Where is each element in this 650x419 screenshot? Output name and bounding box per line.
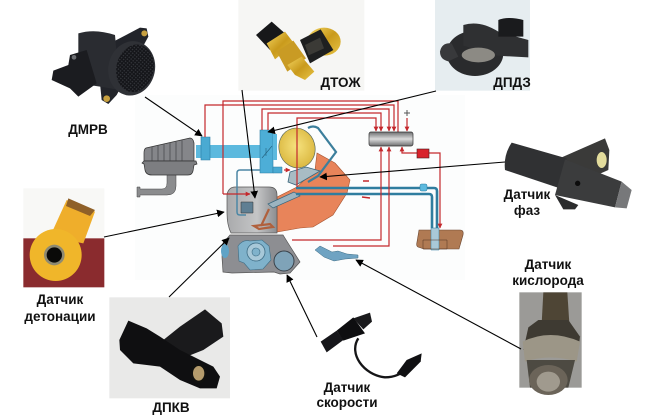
photo: mass air flow sensor (52, 28, 160, 104)
pointer arrows (104, 90, 521, 349)
ECU (369, 132, 413, 146)
label: Датчик детонации: Датчик (37, 292, 84, 307)
engine block (221, 170, 300, 274)
fuel filter (420, 184, 427, 191)
photo: camshaft phase sensor (505, 138, 632, 209)
plus terminal (404, 110, 410, 116)
photo: coolant temperature sensor (238, 0, 364, 91)
label: ДМРВ: ДМРВ (68, 122, 108, 137)
photo: knock sensor (23, 188, 104, 287)
label: ДПДЗ: ДПДЗ (493, 75, 531, 90)
crankcase (222, 235, 300, 274)
yellow plenum (274, 124, 320, 172)
label: Датчик кислорода: кислорода (512, 273, 584, 288)
label: ДТОЖ: ДТОЖ (320, 75, 361, 90)
arrow: датчик фаз (320, 162, 505, 177)
fuel tank (417, 228, 463, 250)
label: Датчик фаз: фаз (514, 203, 540, 218)
label A (284, 169, 290, 171)
photo: throttle position sensor (435, 0, 530, 91)
photo: oxygen sensor (519, 292, 582, 395)
arrow: датчик детонации (104, 212, 224, 237)
photo: speed sensor (321, 313, 422, 377)
throttle body: А (290, 169, 296, 178)
arrow: ДПДЗ (268, 91, 436, 132)
injector rail (268, 126, 336, 208)
fuel pump relay (417, 149, 429, 158)
label: Датчик скорости: Датчик (324, 380, 371, 395)
throttle body (260, 130, 296, 178)
label: Датчик детонации: детонации (24, 309, 96, 324)
photo: crankshaft position sensor (109, 297, 230, 398)
label: Датчик фаз: Датчик (504, 187, 551, 202)
arrow: ДПКВ (169, 238, 229, 297)
arrow: ДМРВ (145, 97, 202, 136)
oxygen sensor on exhaust (315, 246, 358, 261)
orange intake manifold (277, 153, 350, 232)
label: ДПКВ: ДПКВ (152, 400, 190, 415)
fuel lines (296, 188, 437, 228)
arrow: датчик скорости (287, 275, 317, 337)
air filter and intake (137, 137, 262, 197)
red signal wiring (205, 101, 440, 246)
arrow: ДТОЖ (242, 90, 255, 198)
panel: engine system diagram (135, 95, 465, 280)
label: Датчик кислорода: Датчик (525, 257, 572, 272)
arrow: датчик кислорода (356, 260, 521, 349)
label: Датчик скорости: скорости (316, 395, 378, 410)
